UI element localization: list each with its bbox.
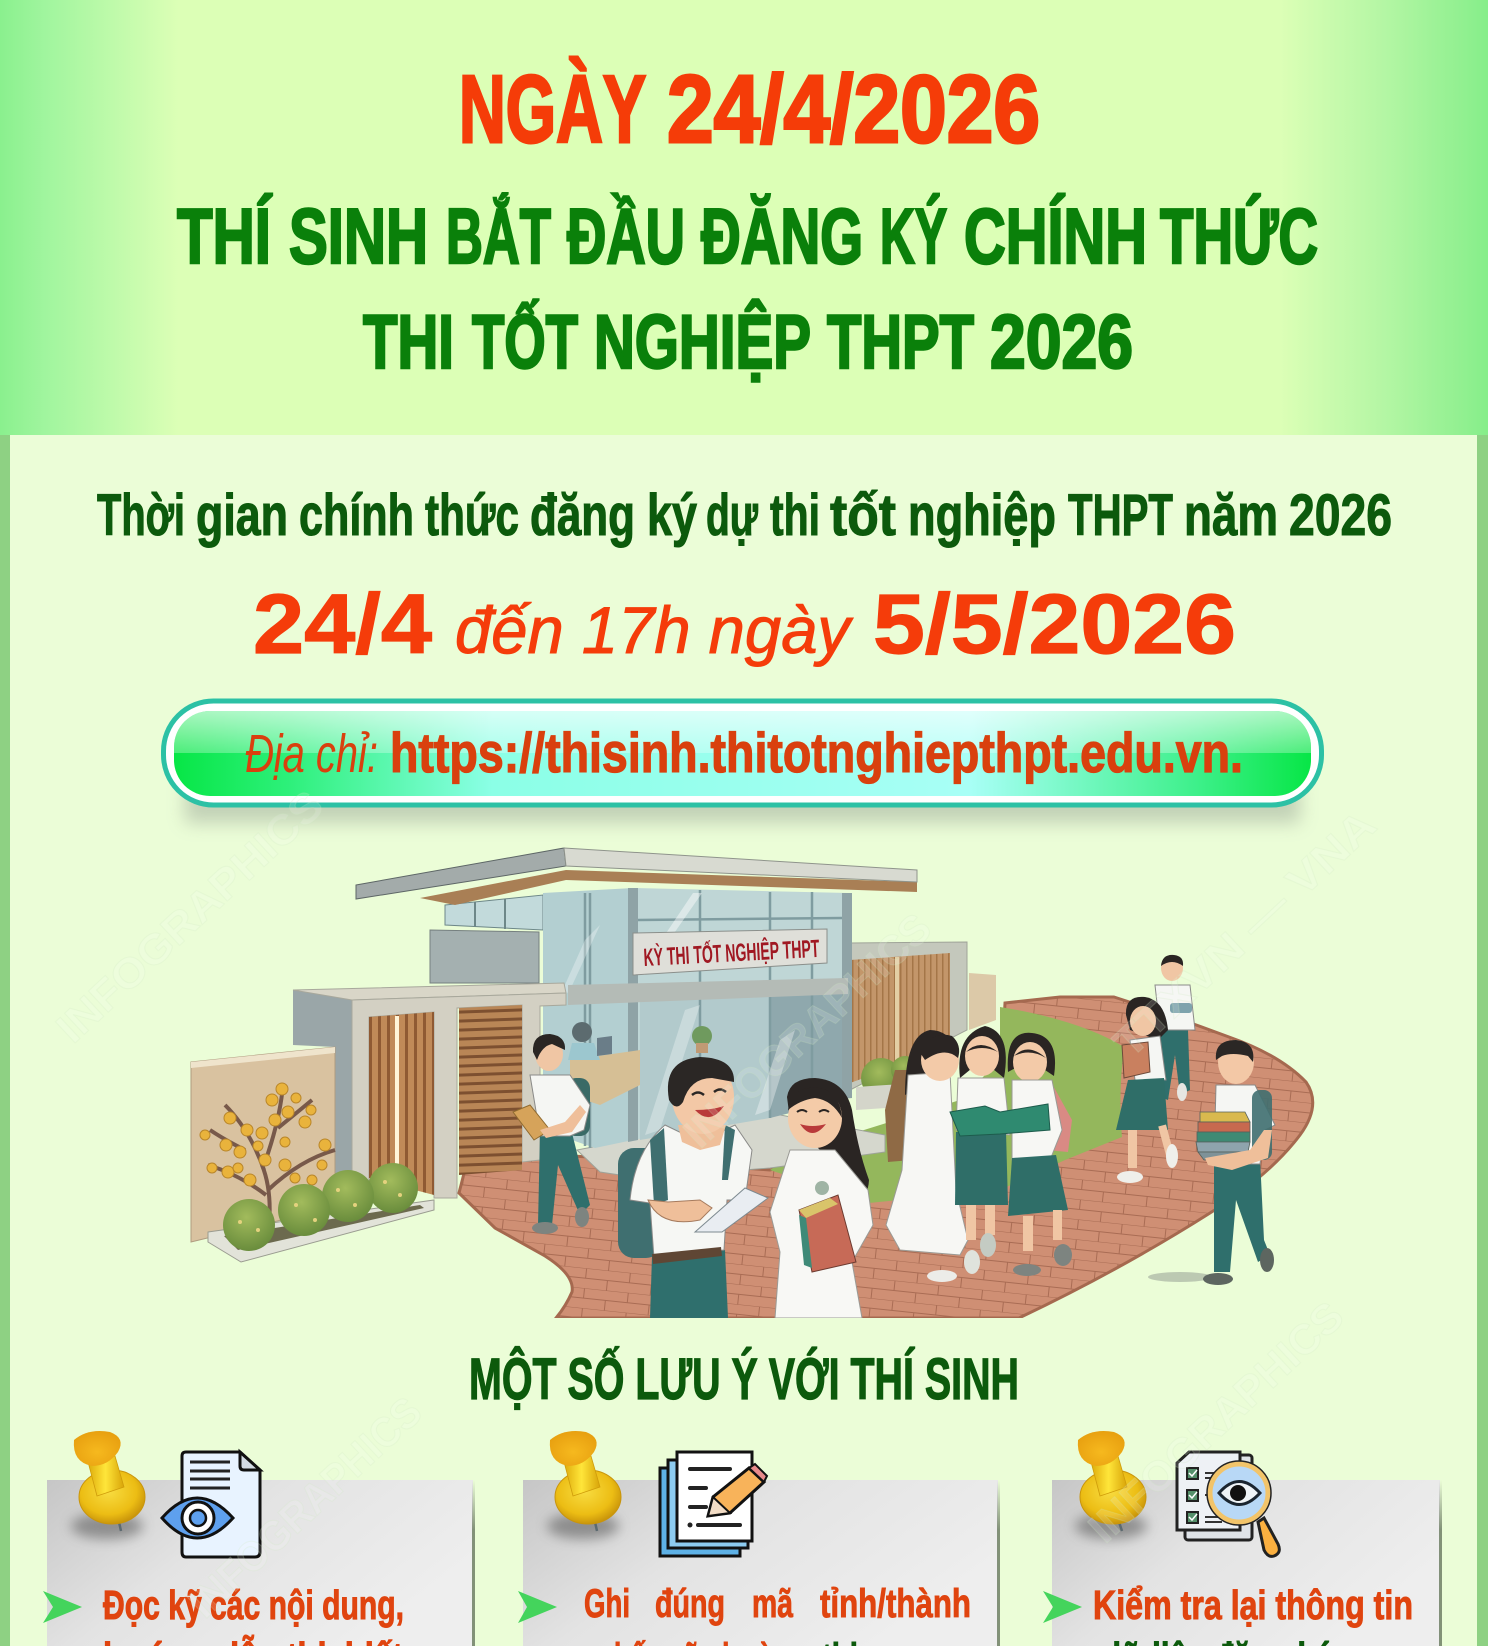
title line 2: CHÍNH: [964, 192, 1147, 280]
title line 3: NGHIỆP: [594, 299, 811, 385]
panel: card 2 write codes: [518, 1431, 1000, 1646]
address pill shadow: [185, 785, 1300, 823]
registration period heading: gian: [196, 483, 288, 548]
student in back with books: [1155, 955, 1195, 1107]
card 2 text: tỉnh/thành: [820, 1582, 971, 1626]
card 2 text: Ghi: [584, 1582, 630, 1626]
registration dates: đến 17h ngày: [455, 593, 854, 667]
illustration: exam building and students: [191, 848, 1313, 1318]
title date line: NGÀY: [459, 56, 646, 163]
title line 2: BẮT: [446, 192, 551, 280]
entrance sign: [633, 929, 827, 975]
registration dates: 24/4: [253, 577, 432, 671]
panel: card 1 read instructions: [43, 1431, 475, 1646]
roof: [356, 848, 917, 905]
registration period heading: THPT: [1068, 483, 1173, 548]
card 2 text: [584, 1582, 971, 1646]
panel: card 3 check information: [1043, 1431, 1442, 1646]
group of three female students with book: [885, 1026, 1072, 1282]
watermarks: INFOGRAPHICS: [674, 904, 940, 1157]
main male student with backpack: [618, 1057, 768, 1318]
registration period heading: đăng: [530, 483, 635, 548]
title line 2: THÍ: [177, 192, 273, 280]
title date line: 24/4/2026: [667, 56, 1040, 163]
icon: push pin: [547, 1431, 621, 1539]
side wing with wood cladding: [850, 942, 996, 1110]
registration period heading: [97, 483, 1392, 548]
card 2 text: đúng: [655, 1582, 725, 1626]
watermarks: TTXVN — VNA: [1104, 800, 1385, 1067]
title line 2: ĐẦU: [567, 192, 685, 280]
icon: push pin: [1075, 1431, 1147, 1539]
lawn: [770, 1007, 1124, 1203]
section heading: MỘT SỐ LƯU Ý VỚI THÍ SINH: [469, 1347, 1019, 1412]
arrow bullet: [518, 1591, 557, 1623]
female student walking: [1116, 997, 1178, 1183]
watermarks: INFOGRAPHICS: [1079, 1292, 1352, 1552]
registration period heading: năm: [1184, 483, 1278, 548]
title line 3: TỐT: [472, 300, 578, 385]
title line 2: SINH: [289, 192, 428, 280]
registration period heading: tốt: [830, 483, 896, 548]
planter with shrubs: [208, 1163, 434, 1262]
card 1 text: [103, 1582, 404, 1646]
registration period heading: thức: [425, 483, 519, 548]
student with stack of books: [1148, 1040, 1275, 1285]
title date line: [459, 56, 1040, 163]
registration period heading: 2026: [1289, 483, 1392, 548]
brick walkway: [459, 997, 1313, 1318]
yellow apricot tree: [200, 1083, 335, 1225]
icon: papers and pencil: [660, 1452, 767, 1556]
card 2 text: mã: [752, 1582, 794, 1626]
watermarks: INFOGRAPHICS: [179, 1388, 431, 1627]
main female student in ao dai: [770, 1078, 873, 1318]
concrete block: [430, 930, 539, 983]
icon: checklist and magnifier: [1177, 1452, 1279, 1556]
gate wall: [293, 983, 566, 1200]
title line 2: ĐĂNG: [701, 192, 863, 280]
watermarks: INFOGRAPHICS: [47, 781, 332, 1052]
title line 2: [177, 192, 1318, 280]
registration period heading: thi: [770, 483, 820, 548]
address label: Địa chỉ:: [245, 724, 378, 784]
beige feature wall: [191, 1047, 335, 1242]
title line 3: 2026: [990, 300, 1133, 385]
registration dates: [253, 577, 1236, 671]
arrow bullet: [43, 1591, 82, 1623]
title line 3: THI: [363, 300, 454, 385]
address url: https://thisinh.thitotnghiepthpt.edu.vn.: [390, 721, 1243, 784]
title line 3: [363, 299, 1133, 385]
student walking with folder: [513, 1034, 590, 1234]
registration period heading: Thời: [97, 483, 185, 548]
icon: push pin: [71, 1431, 145, 1539]
registration period heading: dự: [706, 483, 758, 548]
left side strip: [0, 435, 10, 1646]
registration period heading: chính: [299, 483, 414, 548]
registration dates: 5/5/2026: [873, 577, 1236, 671]
card 1 text: Đọc kỹ các nội dung,: [103, 1582, 404, 1628]
title line 2: KÝ: [880, 192, 947, 280]
glass facade: [445, 888, 852, 1148]
title line 2: THỨC: [1160, 192, 1318, 280]
registration period heading: ký: [647, 483, 697, 548]
watermarks: [47, 781, 1385, 1627]
address pill: [164, 701, 1322, 805]
arrow bullet: [1043, 1591, 1082, 1623]
entrance sign: KỲ THI TỐT NGHIỆP THPT: [643, 933, 820, 972]
title line 3: THPT: [827, 300, 974, 385]
header banner: [0, 0, 1488, 435]
icon: document with eye: [162, 1452, 260, 1557]
entrance platform: [577, 1113, 885, 1178]
right side strip: [1477, 435, 1488, 1646]
registration period heading: nghiệp: [908, 483, 1056, 548]
